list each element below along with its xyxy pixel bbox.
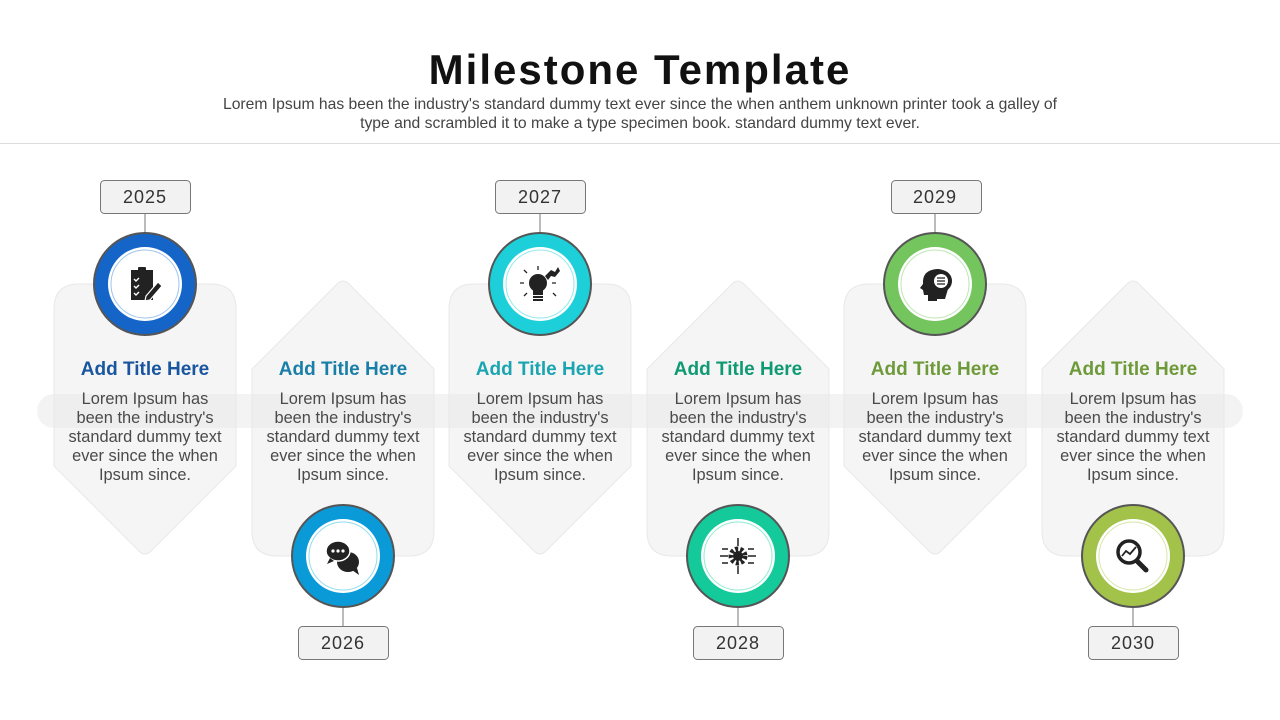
titles: Add Title Here	[871, 359, 999, 380]
body texts: been the industry's	[471, 409, 609, 427]
body texts: Ipsum since.	[1087, 466, 1179, 484]
body texts: standard dummy text	[1056, 428, 1210, 446]
body texts: been the industry's	[76, 409, 214, 427]
body texts: standard dummy text	[463, 428, 617, 446]
body texts: standard dummy text	[266, 428, 420, 446]
body texts: Ipsum since.	[297, 466, 389, 484]
titles: Add Title Here	[279, 359, 407, 380]
panel: 2026	[252, 281, 434, 556]
title: Milestone Template	[429, 46, 851, 93]
body texts: Lorem Ipsum has	[1070, 390, 1196, 408]
icon circle: 2027 bulb puzzle	[489, 233, 591, 335]
body texts: standard dummy text	[68, 428, 222, 446]
body texts: Lorem Ipsum has	[872, 390, 998, 408]
panel: 2027	[449, 284, 631, 554]
titles: Add Title Here	[674, 359, 802, 380]
year boxes: 2029	[913, 187, 957, 207]
subtitle: Lorem Ipsum has been the industry's standard dummy text ever since the when anthem unknown printer took a galley of	[223, 96, 1058, 113]
body texts: Ipsum since.	[692, 466, 784, 484]
body texts: Ipsum since.	[99, 466, 191, 484]
body texts: ever since the when	[72, 447, 218, 465]
titles: Add Title Here	[476, 359, 604, 380]
subtitle	[223, 96, 1058, 132]
subtitle: type and scrambled it to make a type specimen book. standard dummy text ever.	[360, 115, 920, 132]
titles: Add Title Here	[1069, 359, 1197, 380]
body texts: been the industry's	[669, 409, 807, 427]
body texts: been the industry's	[1064, 409, 1202, 427]
icon circle: 2028 gear arrows	[687, 505, 789, 607]
body texts: Ipsum since.	[889, 466, 981, 484]
icon circle: 2029 head gear	[884, 233, 986, 335]
connectors	[145, 214, 1133, 626]
year boxes: 2026	[321, 633, 365, 653]
body texts: ever since the when	[665, 447, 811, 465]
year boxes	[100, 180, 1178, 660]
icon circle: 2025 clipboard	[94, 233, 196, 335]
panel: 2030	[1042, 281, 1224, 556]
panel: 2028	[647, 281, 829, 556]
body texts: been the industry's	[866, 409, 1004, 427]
body texts: Lorem Ipsum has	[280, 390, 406, 408]
body texts: Ipsum since.	[494, 466, 586, 484]
body texts: ever since the when	[270, 447, 416, 465]
body texts: ever since the when	[467, 447, 613, 465]
icon circle: 2030 search chart	[1082, 505, 1184, 607]
year boxes: 2027	[518, 187, 562, 207]
body texts: been the industry's	[274, 409, 412, 427]
panel: 2029	[844, 284, 1026, 554]
body texts: Lorem Ipsum has	[82, 390, 208, 408]
body texts: ever since the when	[1060, 447, 1206, 465]
body texts: Lorem Ipsum has	[675, 390, 801, 408]
body texts: standard dummy text	[858, 428, 1012, 446]
body texts: Lorem Ipsum has	[477, 390, 603, 408]
horizontal band	[37, 394, 1243, 428]
body texts: standard dummy text	[661, 428, 815, 446]
year boxes: 2028	[716, 633, 760, 653]
year boxes: 2025	[123, 187, 167, 207]
titles: Add Title Here	[81, 359, 209, 380]
body texts	[68, 390, 1210, 484]
year boxes: 2030	[1111, 633, 1155, 653]
body texts: ever since the when	[862, 447, 1008, 465]
titles	[81, 359, 1197, 380]
panel: 2025	[54, 284, 236, 554]
icon circle: 2026 chat	[292, 505, 394, 607]
